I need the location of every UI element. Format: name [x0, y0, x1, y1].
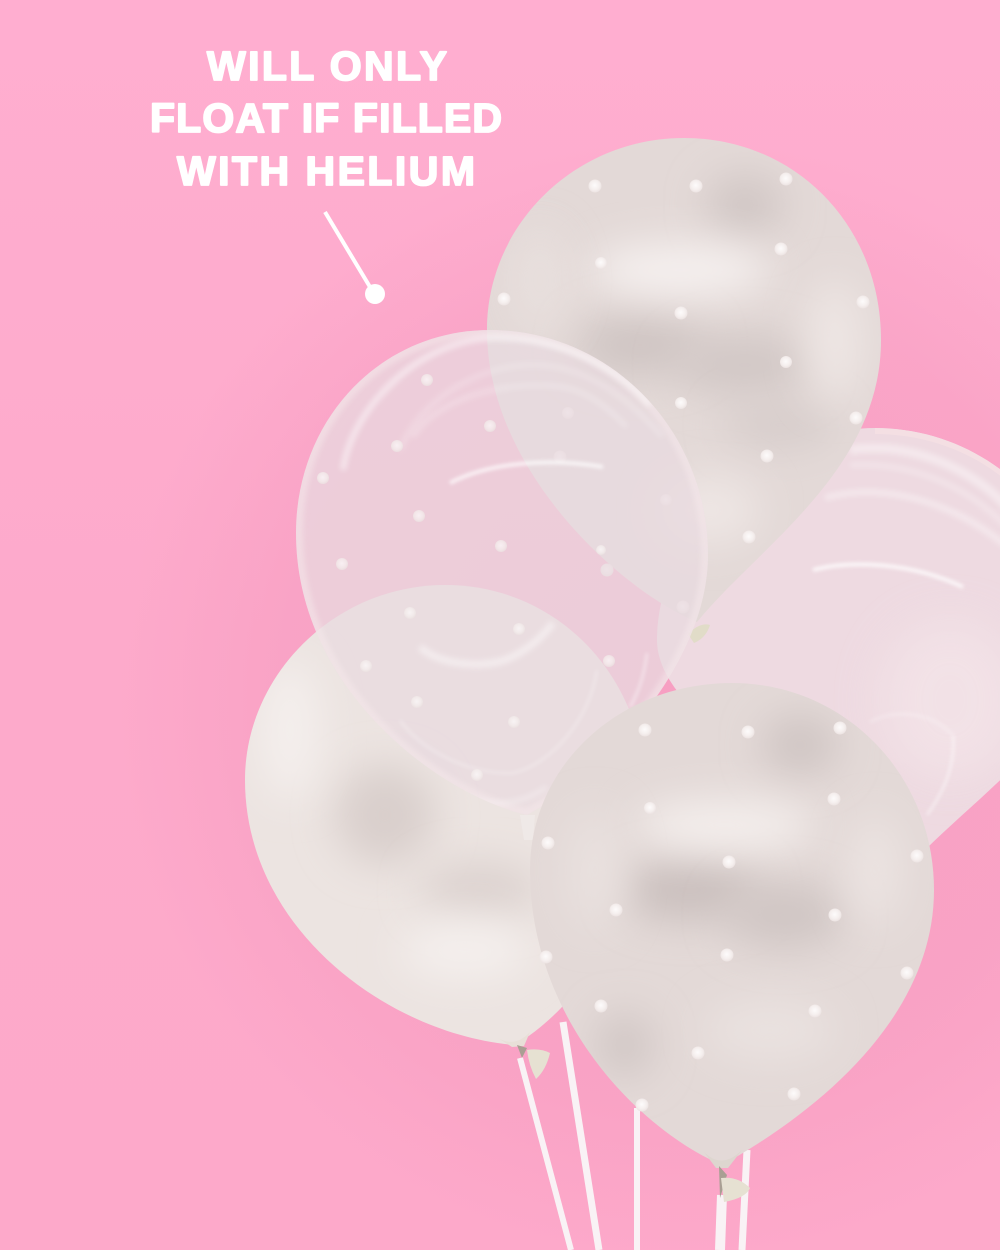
dots: pearls on front balloon: [540, 722, 924, 1112]
balloon: clear right: [657, 428, 1000, 850]
title: FLOAT IF FILLED: [150, 95, 502, 141]
knot: bottom left balloon: [498, 1032, 550, 1079]
balloon: pearl front: [530, 683, 934, 1202]
arrow: pointer line with dot: [325, 212, 385, 304]
balloon: clear middle: [296, 330, 708, 840]
knot: top balloon: [688, 624, 710, 643]
title: WILL ONLY: [207, 43, 447, 89]
title: [150, 43, 502, 194]
dots: pearls on top balloon: [498, 172, 870, 614]
knot: clear balloon neck: [520, 815, 535, 840]
balloon: pearl top: [487, 138, 881, 643]
balloon: pearl bottom left: [245, 585, 645, 1045]
title: WITH HELIUM: [177, 148, 475, 194]
knot: front balloon: [704, 1150, 742, 1168]
dots: pearls on middle balloon: [317, 374, 615, 781]
sticks: [520, 1022, 747, 1250]
